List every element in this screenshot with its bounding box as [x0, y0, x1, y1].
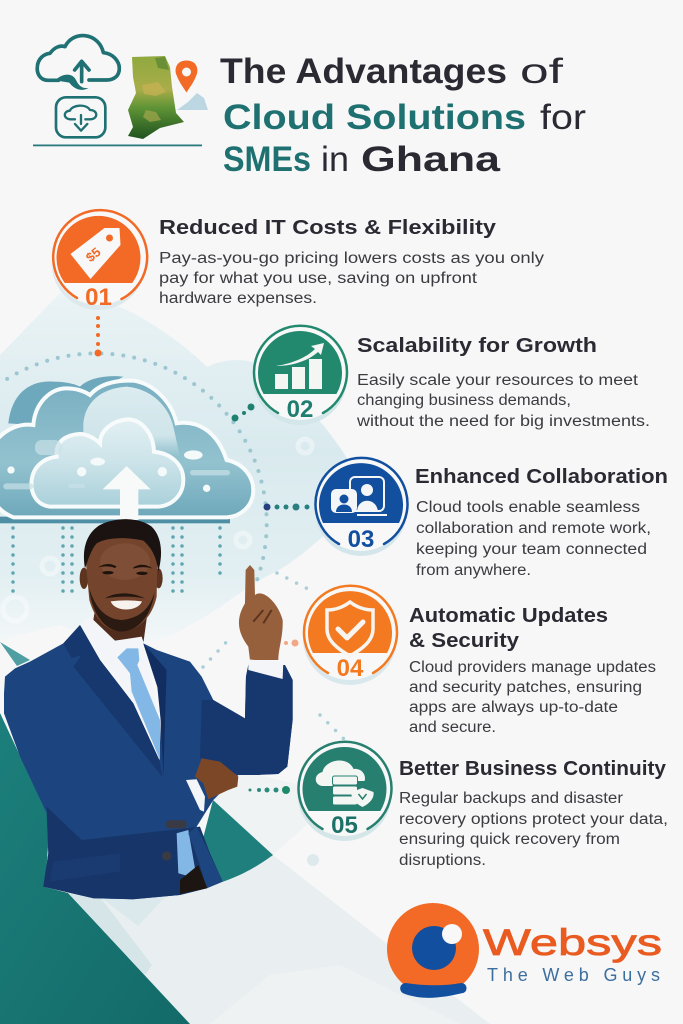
heading and text: business continuity	[399, 757, 668, 869]
icon: price tag: $5	[83, 244, 104, 265]
heading and text: reduced IT costs: Reduced IT Costs & Flexibility	[159, 216, 497, 239]
connector: 05 dots	[248, 786, 290, 794]
smile	[111, 600, 142, 609]
ring	[298, 742, 392, 829]
badge 04	[303, 586, 397, 685]
dome	[302, 747, 386, 811]
heading and text: reduced IT costs: pay for what you use, saving on upfront	[159, 270, 478, 287]
icon: cloud server and shield	[316, 761, 374, 807]
head	[86, 535, 157, 632]
right lapel	[143, 643, 167, 777]
icon: map pin and cloud	[176, 60, 208, 110]
logo tagline: The Web Guys	[487, 965, 660, 985]
heading and text: updates and security	[409, 604, 656, 736]
small details	[7, 450, 210, 492]
icon: shield check	[327, 602, 373, 656]
lower hand	[195, 758, 238, 799]
heading and text: business continuity: Better Business Continuity	[399, 757, 667, 780]
hair	[84, 519, 161, 572]
swoosh	[55, 75, 89, 90]
badge 02	[253, 326, 347, 425]
logo wordmark: Websys	[483, 922, 662, 963]
heading and text: business continuity: Regular backups and disaster	[399, 790, 623, 807]
badge backing	[303, 591, 397, 685]
heading and text: business continuity: disruptions.	[399, 852, 486, 869]
heading and text: reduced IT costs: Pay-as-you-go pricing lowers costs as you only	[159, 250, 544, 267]
forearm dark	[243, 665, 293, 775]
eyes and brows	[98, 564, 153, 575]
icon: video call	[331, 477, 387, 516]
heading and text: scalability: without the need for big investments.	[356, 413, 650, 430]
number: 03	[348, 526, 374, 553]
cloud outline	[37, 36, 119, 80]
suit	[4, 617, 293, 899]
heading and text: business continuity: recovery options protect your data,	[399, 811, 668, 828]
heading and text: collaboration: Cloud tools enable seamless	[416, 499, 640, 516]
ring	[254, 326, 347, 413]
ring	[53, 210, 147, 299]
badge 03	[315, 458, 408, 556]
heading and text: updates and security: Cloud providers manage updates	[409, 659, 656, 676]
light centre	[83, 387, 180, 457]
heading and text: scalability: changing business demands,	[357, 392, 571, 409]
title: in	[321, 140, 349, 179]
shirt	[79, 617, 160, 760]
heading and text: scalability: Scalability for Growth	[357, 334, 597, 357]
title: Ghana	[361, 140, 501, 179]
left lapel	[63, 625, 163, 777]
heading and text: business continuity: ensuring quick recovery from	[399, 831, 620, 848]
connector: 04 dots	[284, 640, 298, 646]
ears	[80, 568, 163, 589]
raised hand	[239, 565, 283, 660]
header divider line	[33, 144, 202, 146]
tie	[117, 648, 160, 760]
lower tie	[177, 830, 195, 877]
connector: 02 dots	[232, 404, 254, 422]
dome	[308, 591, 392, 653]
ring	[304, 586, 397, 673]
rounded box with small cloud	[56, 97, 105, 137]
heading and text: updates and security: Automatic Updates	[409, 604, 608, 627]
title: Cloud Solutions	[223, 98, 526, 137]
badge backing	[52, 216, 146, 310]
heading and text: collaboration: keeping your team connected	[416, 541, 647, 558]
number: 04	[337, 655, 364, 682]
heading and text: updates and security: & Security	[409, 629, 520, 652]
heading and text: reduced IT costs	[159, 216, 544, 307]
heading and text: reduced IT costs: hardware expenses.	[159, 290, 317, 307]
back lobe	[8, 376, 123, 425]
connector: 01 dots	[94, 316, 102, 356]
face highlight	[100, 543, 150, 580]
connector: 03 dots	[264, 504, 310, 510]
badge backing	[253, 331, 347, 425]
small cloud	[65, 106, 96, 131]
icon: Ghana map	[128, 56, 184, 139]
right arm shadow	[200, 700, 260, 775]
ring	[316, 458, 408, 544]
hero cloud illustration	[0, 376, 253, 523]
logo mark	[387, 903, 479, 998]
badge 05	[298, 742, 392, 841]
badge backing	[298, 747, 392, 841]
heading and text: collaboration: collaboration and remote work,	[416, 520, 651, 537]
dome	[258, 331, 342, 394]
heading and text: scalability	[356, 334, 650, 430]
data dots under the cloud	[13, 528, 220, 600]
background: pale hill shapes	[0, 293, 490, 1024]
heading and text: updates and security: and security patches, ensuring	[409, 679, 642, 696]
faint dashes on right of man	[203, 573, 345, 740]
dotted orbit around the cloud	[0, 353, 267, 580]
pocket	[50, 853, 120, 882]
up arrow	[75, 61, 89, 82]
gears	[3, 439, 312, 621]
number: 02	[287, 396, 313, 423]
jacket silhouette	[4, 625, 293, 899]
outer cloud	[0, 381, 253, 517]
badge 01	[52, 210, 147, 311]
bottom shadow bar	[0, 517, 230, 523]
heading and text: scalability: Easily scale your resources to meet	[357, 372, 639, 389]
beard	[89, 588, 155, 632]
title: of	[520, 52, 563, 91]
number: 05	[331, 812, 358, 839]
header icon: cloud upload	[37, 36, 119, 137]
heading and text: collaboration: Enhanced Collaboration	[415, 465, 668, 488]
icon: growth chart	[275, 343, 324, 389]
heading and text: updates and security: apps are always up-to-date	[409, 699, 618, 716]
lower jacket shadow	[43, 807, 223, 899]
buttons	[162, 820, 187, 861]
number: 01	[85, 284, 112, 311]
trousers and belt	[180, 865, 207, 894]
title: for	[540, 98, 586, 137]
businessman figure	[4, 519, 293, 899]
inner cloud	[31, 419, 183, 507]
shirt cuff	[186, 779, 205, 812]
heading and text: updates and security: and secure.	[409, 719, 496, 736]
neck	[93, 607, 148, 643]
jacket front edge	[188, 827, 223, 888]
logo: Websys	[387, 903, 662, 998]
title: The Advantages	[220, 52, 507, 91]
title	[220, 52, 586, 179]
upload arrow	[103, 466, 151, 520]
heading and text: collaboration: from anywhere.	[416, 562, 531, 579]
badge backing	[315, 464, 407, 556]
dome	[319, 463, 403, 523]
background: teal angled shapes	[0, 642, 273, 1024]
moustache	[105, 593, 145, 598]
raised cuff	[248, 659, 283, 679]
dome	[57, 216, 141, 283]
title: SMEs	[223, 140, 311, 179]
heading and text: collaboration	[415, 465, 668, 579]
